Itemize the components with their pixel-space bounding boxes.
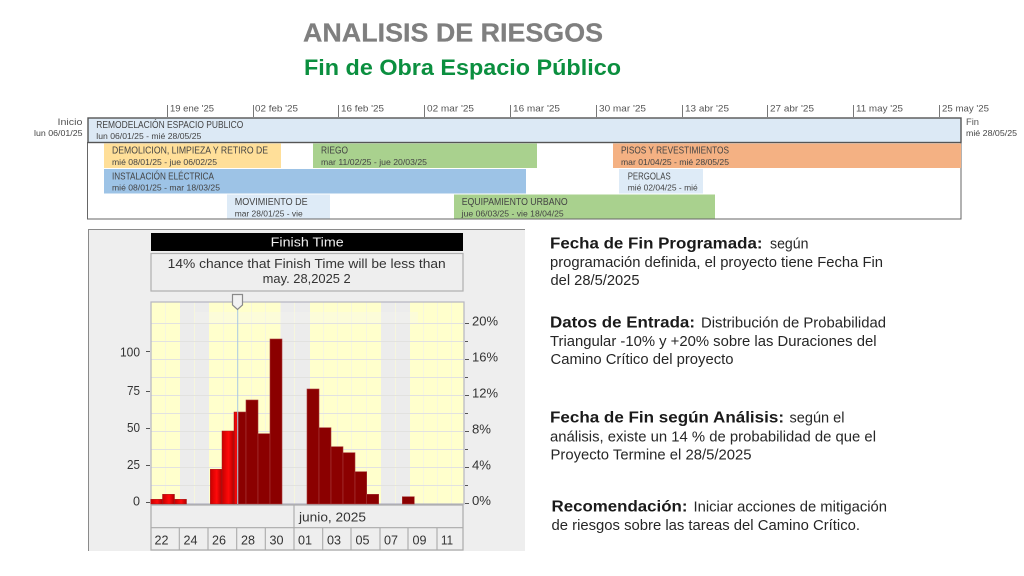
text block: fecha de fin segun analisis: análisis, existe un 14 % de probabilidad de que el (550, 430, 876, 446)
task: pisos y revestimientos (613, 144, 961, 168)
project start label (34, 117, 83, 138)
text block: datos de entrada: Triangular -10% y +20% sobre las Duraciones del (550, 334, 876, 350)
task: riego (313, 144, 537, 168)
probability statement: 14% chance that Finish Time will be less than (168, 257, 446, 271)
histogram (151, 294, 464, 504)
date axis: 24 (184, 533, 198, 547)
date axis: 16 mar '25 (513, 104, 560, 114)
text block: fecha de fin programada: del 28/5/2025 (550, 273, 640, 289)
right axis: percent: 4% (472, 458, 491, 472)
probability statement (151, 254, 463, 291)
task: movimiento de: mar 28/01/25 - vie (235, 209, 303, 219)
left axis: count: 100 (120, 346, 140, 360)
task: movimiento de (227, 194, 330, 219)
left axis: count: 75 (127, 384, 140, 398)
task: demolicion: mié 08/01/25 - jue 06/02/25 (112, 157, 217, 167)
text block: datos de entrada: Distribución de Probabilidad (701, 316, 886, 332)
date axis: 07 (384, 533, 398, 547)
project end label: mié 28/05/25 (966, 128, 1017, 138)
date axis (168, 104, 989, 117)
task: equipamiento urbano: EQUIPAMIENTO URBANO (462, 197, 568, 208)
text block: datos de entrada (550, 315, 886, 368)
probability statement: may. 28,2025 2 (263, 272, 351, 286)
right axis: percent: 20% (472, 314, 498, 328)
text block: datos de entrada: Datos de Entrada: (550, 315, 695, 332)
task: movimiento de: MOVIMIENTO DE (235, 197, 308, 208)
task: demolicion: DEMOLICION, LIMPIEZA Y RETIRO DE (112, 146, 268, 157)
text block: fecha de fin programada: Fecha de Fin Programada: (550, 236, 762, 252)
date axis: 16 feb '25 (341, 104, 384, 114)
summary bar (88, 118, 961, 142)
date axis: 03 (327, 533, 341, 547)
date axis: 25 may '25 (942, 104, 989, 114)
date axis: 11 (441, 533, 453, 547)
date axis (151, 505, 463, 550)
left axis: count: 50 (127, 421, 140, 435)
date axis: 02 mar '25 (427, 104, 474, 114)
date axis: 30 mar '25 (599, 104, 646, 114)
right axis: percent: 16% (472, 350, 498, 364)
probability marker (232, 294, 242, 504)
bars after the marker (238, 339, 414, 504)
chart header: Finish Time (271, 235, 344, 250)
task: pergolas (619, 169, 703, 194)
task: instalacion electrica: mié 08/01/25 - mar 18/03/25 (112, 183, 220, 193)
chart background (88, 229, 525, 551)
left axis: count (120, 346, 150, 508)
text block: fecha de fin segun analisis: según el (790, 411, 844, 427)
text block: recomendacion: Recomendación: (552, 499, 688, 516)
text block: recomendacion (552, 499, 887, 534)
date axis: 22 (154, 533, 168, 547)
text block: fecha de fin programada (550, 236, 883, 289)
task: equipamiento urbano (454, 194, 715, 219)
left axis: count: 25 (127, 458, 140, 472)
date axis: 02 feb '25 (255, 104, 298, 114)
task: riego: RIEGO (321, 146, 348, 157)
text block: datos de entrada: Camino Crítico del proyecto (550, 352, 734, 368)
date axis: junio, 2025 (298, 511, 366, 525)
date axis: 13 abr '25 (685, 104, 729, 114)
date axis: 26 (212, 533, 226, 547)
task: pergolas: mié 02/04/25 - mié (628, 183, 698, 193)
gantt timeline (34, 104, 1017, 219)
text block: recomendacion: Iniciar acciones de mitigación (694, 500, 887, 516)
date axis: 27 abr '25 (770, 104, 814, 114)
text block: fecha de fin segun analisis: Proyecto Termine el 28/5/2025 (550, 447, 752, 463)
task: pisos y revestimientos: mar 01/04/25 - mié 28/05/25 (621, 157, 729, 167)
panel: finish time chart (88, 229, 525, 551)
text block: fecha de fin programada: programación definida, el proyecto tiene Fecha Fin (550, 255, 883, 271)
date axis: 19 ene '25 (170, 104, 214, 114)
project start label: Inicio (58, 117, 82, 128)
task: pergolas: PERGOLAS (628, 171, 671, 182)
task: demolicion (104, 144, 281, 168)
right axis: percent: 12% (472, 386, 498, 400)
text block: fecha de fin segun analisis (550, 410, 876, 463)
project end label (966, 117, 1017, 138)
bars before the marker (151, 412, 238, 504)
task: instalacion electrica (104, 169, 526, 194)
date axis: 28 (241, 533, 255, 547)
task: equipamiento urbano: jue 06/03/25 - vie 18/04/25 (461, 209, 564, 219)
date axis: 01 (298, 533, 312, 547)
chart header (151, 233, 463, 251)
timeline frame (88, 142, 961, 219)
task: riego: mar 11/02/25 - jue 20/03/25 (321, 157, 427, 167)
left axis: count: 0 (133, 494, 140, 508)
text block: recomendacion: de riesgos sobre las tareas del Camino Crítico. (552, 518, 860, 534)
date axis: 09 (412, 533, 426, 547)
project start label: lun 06/01/25 (34, 128, 83, 138)
summary bar: lun 06/01/25 - mié 28/05/25 (96, 131, 202, 141)
right axis: percent: 8% (472, 422, 491, 436)
task: instalacion electrica: INSTALACIÓN ELÉCTRICA (112, 171, 214, 182)
summary bar: REMODELACIÓN ESPACIO PUBLICO (96, 120, 244, 131)
subtitle: Fin de Obra Espacio Público (304, 55, 621, 80)
right axis: percent (465, 314, 498, 508)
task: pisos y revestimientos: PISOS Y REVESTIMIENTOS (621, 146, 729, 157)
project end label: Fin (966, 117, 979, 128)
date axis: 11 may '25 (856, 104, 903, 114)
right axis: percent: 0% (472, 494, 491, 508)
text block: fecha de fin segun analisis: Fecha de Fin según Análisis: (550, 410, 784, 427)
text block: fecha de fin programada: según (770, 236, 808, 252)
date axis: 30 (270, 533, 284, 547)
title: ANALISIS DE RIESGOS (303, 20, 603, 48)
date axis: 05 (356, 533, 370, 547)
